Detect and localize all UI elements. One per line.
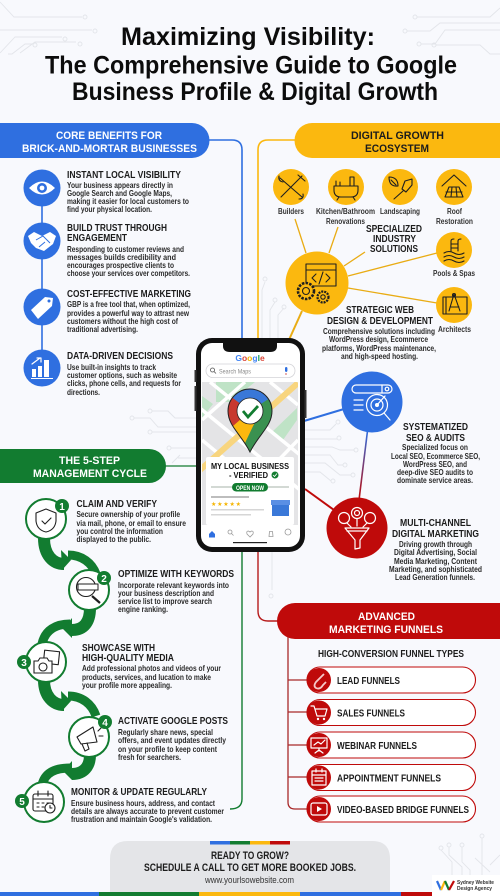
panel: call to action: SCHEDULE A CALL TO GET MORE BOOKED JOBS. bbox=[144, 862, 356, 874]
panel: core benefits header bbox=[0, 123, 209, 158]
icon: seo target bbox=[342, 372, 402, 432]
icon: pools bbox=[436, 232, 472, 268]
panel: step 4 activate google posts: 4 bbox=[102, 718, 108, 729]
icon: magnifier bbox=[76, 578, 100, 603]
panel: funnels header: MARKETING FUNNELS bbox=[329, 624, 443, 636]
text: build trust bbox=[67, 222, 190, 278]
icon: handshake bbox=[24, 222, 60, 260]
icon: calendar and clock bbox=[33, 791, 55, 813]
panel: step 3 showcase media: your profile more appealing. bbox=[82, 681, 172, 690]
card: verified business bbox=[206, 457, 294, 525]
icon: price tag bbox=[24, 288, 60, 326]
panel: management cycle header: MANAGEMENT CYCLE bbox=[33, 468, 147, 480]
panel: step 1 claim and verify bbox=[26, 498, 186, 544]
text: multi-channel: Media Marketing, Content bbox=[394, 557, 477, 566]
panel: call to action: READY TO GROW? bbox=[211, 850, 289, 862]
panel: step 5 monitor and update bbox=[15, 782, 225, 824]
text: google logo: Google bbox=[235, 353, 265, 363]
panel: step 4 activate google posts: on your profile to keep content bbox=[118, 745, 217, 754]
text: build trust: encourages prospective clients to bbox=[67, 261, 174, 270]
panel: step 2 optimize with keywords: engine ranking. bbox=[118, 605, 168, 614]
text: systematized seo: SYSTEMATIZED bbox=[403, 421, 468, 433]
icon: marketing funnel bbox=[326, 498, 388, 558]
card: verified business: MY LOCAL BUSINESS bbox=[211, 462, 290, 471]
text: multi-channel: Marketing, and sophisticated bbox=[389, 565, 482, 574]
panel: step 4 activate google posts: fresh for searchers. bbox=[118, 753, 181, 762]
panel: step 4 activate google posts: offers, and event updates directly bbox=[118, 736, 226, 745]
panel: step 1 claim and verify: via mail, phone, or email to ensure bbox=[76, 519, 186, 528]
panel: call to action bbox=[110, 841, 390, 892]
text: strategic web design bbox=[322, 304, 436, 361]
text: instant local visibility bbox=[67, 169, 189, 214]
text: data-driven decisions: Use built-in insights to track bbox=[67, 363, 156, 372]
icon: camera and photo bbox=[34, 650, 60, 673]
connector: phone to funnels bbox=[258, 550, 280, 621]
icon: roof bbox=[436, 169, 472, 205]
panel: step 3 showcase media: Add professional photos and videos of your bbox=[82, 664, 222, 673]
panel: webinar funnels bbox=[307, 732, 476, 758]
icon: shield bbox=[36, 509, 56, 532]
labels: industries: Builders bbox=[278, 207, 305, 216]
panel: management cycle header: THE 5-STEP bbox=[59, 455, 120, 467]
search bar bbox=[206, 364, 295, 378]
text: data-driven decisions: directions. bbox=[67, 388, 100, 397]
panel: phone bbox=[190, 338, 306, 552]
labels: industries: Pools & Spas bbox=[433, 269, 476, 278]
panel: management cycle header bbox=[0, 449, 166, 483]
text: multi-channel bbox=[389, 517, 482, 582]
text: cost-effective marketing: provides a powerful way to attrast new bbox=[67, 309, 190, 318]
panel: lead funnels bbox=[307, 667, 476, 693]
text: instant local visibility: Google Search and Google Maps, bbox=[67, 189, 172, 198]
connector: phone to cycle bottom bbox=[230, 550, 242, 809]
text: cost-effective marketing: customers without the high cost of bbox=[67, 317, 178, 326]
panel: step 5 monitor and update: frustration and maintain Google's validation. bbox=[71, 815, 212, 824]
connector: ecosystem to phone bbox=[258, 140, 298, 340]
panel: digital growth header bbox=[295, 123, 500, 158]
map bbox=[202, 382, 298, 525]
panel: step 1 claim and verify: Secure ownership of your profile bbox=[76, 510, 180, 519]
panel: step 2 optimize with keywords bbox=[69, 568, 234, 614]
chart: 5-step cycle arrows bbox=[42, 538, 96, 785]
text: instant local visibility: find your physical location. bbox=[67, 205, 152, 214]
panel: step 2 optimize with keywords: OPTIMIZE WITH KEYWORDS bbox=[118, 568, 234, 580]
title: The Comprehensive Guide to Google bbox=[45, 52, 457, 80]
panel: step 4 activate google posts: ACTIVATE GOOGLE POSTS bbox=[118, 715, 228, 727]
title: Business Profile & Digital Growth bbox=[72, 78, 438, 106]
panel: core benefits list bbox=[24, 169, 191, 397]
text: instant local visibility: Your business appears directly in bbox=[67, 181, 173, 190]
text: strategic web design: and high-speed hosting. bbox=[341, 352, 418, 361]
card: verified business: - VERIFIED bbox=[229, 471, 268, 480]
panel: step 2 optimize with keywords: service list to improve search bbox=[118, 597, 212, 606]
panel: step 1 claim and verify: you control the information bbox=[76, 527, 163, 536]
panel: call to action: www.yourlsowebsite.com bbox=[204, 875, 294, 885]
labels: industries: Landscaping bbox=[380, 207, 420, 216]
text: cost-effective marketing: GBP is a free tool that, when optimized, bbox=[67, 300, 190, 309]
connectors: industry spokes bbox=[288, 219, 437, 342]
text: strategic web design: STRATEGIC WEB bbox=[346, 304, 414, 316]
text: systematized seo: Specialized focus on bbox=[402, 443, 468, 452]
text: strategic web design: platforms, WordPress maintenance, bbox=[322, 344, 436, 353]
text: build trust: messages builds credibility and bbox=[67, 253, 176, 262]
card: verified business: ★★★★★ bbox=[211, 501, 241, 508]
text: systematized seo bbox=[391, 421, 480, 485]
panel: step 1 claim and verify: displayed to the public. bbox=[76, 535, 151, 544]
panel: step 2 optimize with keywords: your business description and bbox=[118, 589, 214, 598]
labels: industries: Restoration bbox=[436, 217, 473, 226]
panel: webinar funnels: WEBINAR FUNNELS bbox=[337, 740, 417, 752]
text: instant local visibility: making it easier for local customers to bbox=[67, 197, 189, 206]
connector: core benefits to phone bbox=[205, 140, 242, 340]
logo: Sydney Website bbox=[457, 880, 494, 886]
panel: step 3 showcase media: products, services, and lucation to make bbox=[82, 673, 211, 682]
panel: step 3 showcase media: HIGH-QUALITY MEDIA bbox=[82, 652, 174, 664]
panel: sales funnels: SALES FUNNELS bbox=[337, 708, 405, 720]
panel: digital growth header: DIGITAL GROWTH bbox=[351, 130, 444, 142]
connector: management cycle to phone bbox=[160, 465, 197, 467]
connector: funnel tree bbox=[288, 637, 310, 809]
icon: map pin bbox=[224, 385, 272, 452]
panel: step 5 monitor and update: MONITOR & UPDATE REGULARLY bbox=[71, 786, 207, 798]
text: strategic web design: Comprehensive solutions including bbox=[323, 327, 435, 336]
panel: funnels header: ADVANCED bbox=[358, 611, 415, 623]
icon: eye bbox=[24, 170, 60, 206]
panel: step 5 monitor and update: Ensure business hours, address, and contact bbox=[71, 799, 215, 808]
heading: specialized industry solutions: INDUSTRY bbox=[373, 233, 416, 245]
text: strategic web design: DESIGN & DEVELOPMENT bbox=[327, 315, 433, 327]
bottom colour bar bbox=[0, 892, 500, 896]
text: build trust: Responding to customer reviews and bbox=[67, 245, 184, 254]
icon: bar chart bbox=[24, 350, 60, 386]
text: multi-channel: Digital Advertising, Social bbox=[394, 548, 477, 557]
panel: step 1 claim and verify: 1 bbox=[59, 502, 65, 513]
text: data-driven decisions: DATA-DRIVEN DECISIONS bbox=[67, 350, 173, 362]
panel: step 3 showcase media: SHOWCASE WITH bbox=[82, 642, 155, 654]
icon: architects bbox=[436, 287, 472, 323]
panel: step 3 showcase media bbox=[17, 642, 222, 690]
text: data-driven decisions: clicks, phone cells, and requests for bbox=[67, 379, 182, 388]
text: build trust: choose your services over competitors. bbox=[67, 269, 190, 278]
panel: core benefits header: CORE BENEFITS FOR bbox=[56, 130, 162, 142]
heading: funnel types: HIGH-CONVERSION FUNNEL TYPES bbox=[318, 648, 464, 660]
text: build trust: BUILD TRUST THROUGH bbox=[67, 222, 167, 234]
logo bbox=[432, 875, 500, 896]
panel: core benefits header: BRICK-AND-MORTAR BUSINESSES bbox=[22, 143, 197, 155]
panel: step 4 activate google posts: Regularly share news, special bbox=[118, 728, 213, 737]
title: Maximizing Visibility: bbox=[121, 23, 375, 51]
labels: industries: Architects bbox=[438, 325, 472, 334]
labels: industries: Roof bbox=[447, 207, 462, 216]
labels: industries bbox=[278, 207, 476, 334]
panel: step 5 monitor and update: details are always accurate to prevent customer bbox=[71, 807, 225, 816]
icon: kitchen and bathroom bbox=[328, 169, 364, 205]
labels: industries: Kitchen/Bathroom bbox=[316, 207, 375, 216]
text: cost-effective marketing bbox=[67, 288, 191, 334]
text: build trust: ENGAGEMENT bbox=[67, 232, 127, 244]
heading: specialized industry solutions: SOLUTIONS bbox=[370, 243, 418, 255]
heading: specialized industry solutions bbox=[366, 223, 422, 255]
title bbox=[45, 23, 457, 106]
icon: landscaping bbox=[382, 169, 418, 205]
text: multi-channel: MULTI-CHANNEL bbox=[400, 517, 471, 529]
card: verified business: OPEN NOW bbox=[236, 485, 264, 492]
panel: step 2 optimize with keywords: Incorporate relevant keywords into bbox=[118, 581, 229, 590]
panel: step 3 showcase media: 3 bbox=[21, 658, 27, 669]
panel: step 5 monitor and update: 5 bbox=[19, 797, 25, 808]
icon: megaphone bbox=[77, 727, 103, 751]
text: cost-effective marketing: traditional advertising. bbox=[67, 325, 138, 334]
text: data-driven decisions: customer options, such as website bbox=[67, 371, 177, 380]
icon: builders bbox=[273, 169, 309, 205]
labels: industries: Renovations bbox=[326, 217, 366, 226]
panel: video funnels bbox=[307, 796, 476, 822]
text: strategic web design: WordPress design, Ecommerce bbox=[329, 335, 428, 344]
text: multi-channel: Driving growth through bbox=[399, 540, 472, 549]
panel: funnels header bbox=[277, 603, 500, 639]
panel: digital growth header: ECOSYSTEM bbox=[365, 143, 429, 155]
panel: lead funnels: LEAD FUNNELS bbox=[337, 675, 400, 687]
text: data-driven decisions bbox=[67, 350, 182, 397]
panel: step 2 optimize with keywords: 2 bbox=[101, 574, 107, 585]
heading: specialized industry solutions: SPECIALIZED bbox=[366, 223, 422, 235]
panel: appointment funnels bbox=[307, 764, 476, 790]
text: systematized seo: SEO & AUDITS bbox=[406, 432, 465, 444]
bottom navigation bbox=[209, 529, 291, 543]
icon: web development gears bbox=[286, 252, 348, 314]
text: multi-channel: Lead Generation funnels. bbox=[395, 573, 475, 582]
text: instant local visibility: INSTANT LOCAL VISIBILITY bbox=[67, 169, 181, 181]
connectors: seo and marketing bbox=[304, 409, 368, 510]
logo: Design Agency bbox=[457, 886, 492, 892]
search bar: Search Maps bbox=[219, 368, 252, 376]
panel: sales funnels bbox=[307, 700, 476, 726]
text: systematized seo: deep-dive SEO audits to bbox=[397, 468, 473, 477]
text: systematized seo: dominate service areas. bbox=[397, 476, 473, 485]
text: cost-effective marketing: COST-EFFECTIVE MARKETING bbox=[67, 288, 191, 300]
panel: appointment funnels: APPOINTMENT FUNNELS bbox=[337, 772, 441, 784]
panel: step 4 activate google posts bbox=[69, 715, 228, 762]
text: systematized seo: WordPress SEO, and bbox=[403, 460, 467, 469]
panel: step 1 claim and verify: CLAIM AND VERIFY bbox=[76, 498, 157, 510]
text: multi-channel: DIGITAL MARKETING bbox=[392, 528, 479, 540]
